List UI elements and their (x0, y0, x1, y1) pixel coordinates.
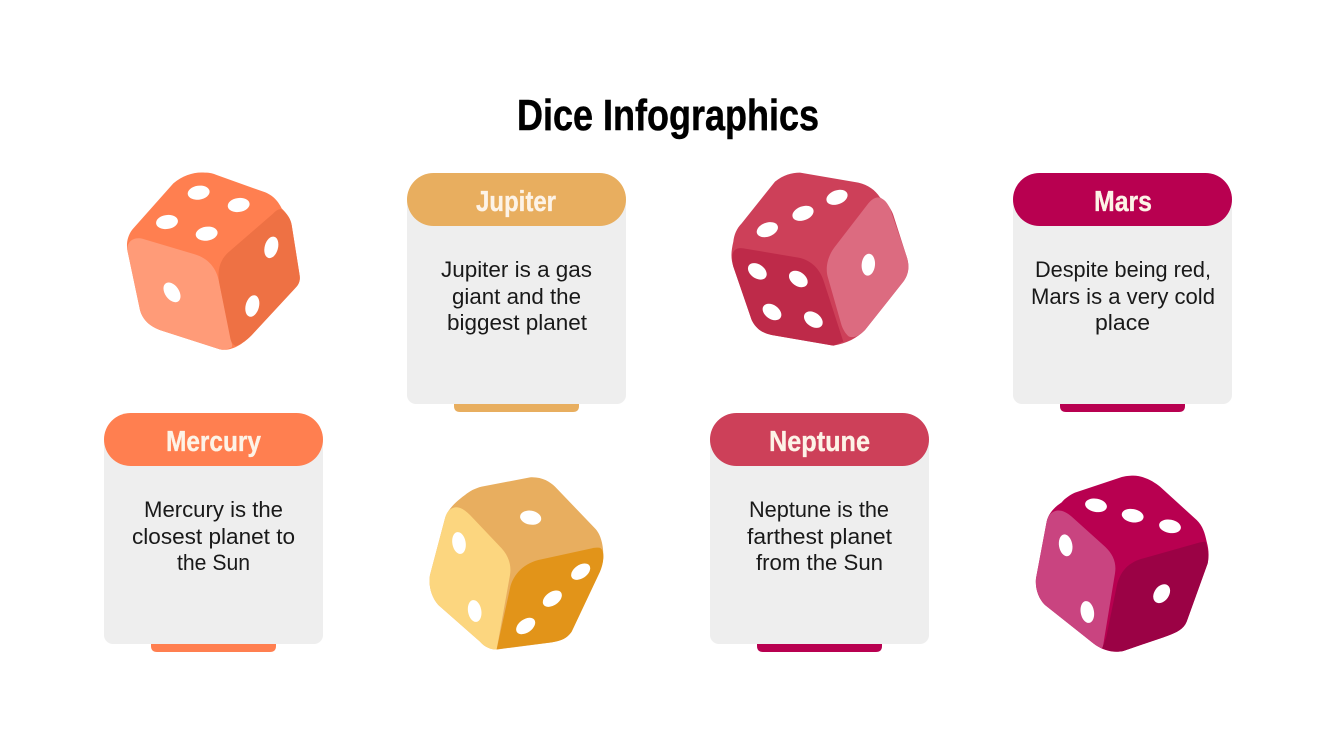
card body (104, 430, 323, 644)
icon: yellow die showing one (430, 477, 603, 649)
text: Neptune description (747, 497, 892, 575)
panel: Mercury (104, 413, 323, 652)
card body (407, 190, 626, 404)
header: Mercury (104, 413, 323, 466)
text: Jupiter description: giant and the (452, 284, 581, 309)
header: Mercury: Mercury (166, 426, 261, 458)
card body (1013, 190, 1232, 404)
text: Mars description: place (1095, 310, 1150, 335)
text: Mercury description: Mercury is the (144, 497, 283, 522)
icon: magenta die showing three (1036, 476, 1209, 652)
card body (710, 430, 929, 644)
panel: Mars (1013, 173, 1232, 412)
card foot tab (1060, 404, 1185, 412)
header: Jupiter: Jupiter (476, 186, 556, 218)
title: Dice Infographics (517, 91, 819, 140)
header: Neptune: Neptune (769, 426, 870, 458)
header: Mars: Mars (1094, 186, 1152, 218)
header: Mars (1013, 173, 1232, 226)
text: Neptune description: from the Sun (756, 550, 883, 575)
card foot tab (757, 644, 882, 652)
text: Mercury description: closest planet to (132, 524, 295, 549)
text: Mars description: Despite being red, (1035, 257, 1211, 282)
icon: red die showing three (731, 173, 908, 346)
text: Mars description (1031, 257, 1215, 335)
panel: Neptune (710, 413, 929, 652)
text: Neptune description: farthest planet (747, 524, 892, 549)
text: Neptune description: Neptune is the (749, 497, 889, 522)
text: Mars description: Mars is a very cold (1031, 284, 1215, 309)
panel: Jupiter (407, 173, 626, 412)
text: Mercury description: the Sun (177, 550, 250, 575)
text: Jupiter description: Jupiter is a gas (441, 257, 592, 282)
icon: orange die showing four (127, 172, 300, 350)
text: Jupiter description: biggest planet (447, 310, 587, 335)
header: Jupiter (407, 173, 626, 226)
header: Neptune (710, 413, 929, 466)
card foot tab (151, 644, 276, 652)
card foot tab (454, 404, 579, 412)
text: Mercury description (132, 497, 295, 575)
text: Jupiter description (441, 257, 592, 335)
